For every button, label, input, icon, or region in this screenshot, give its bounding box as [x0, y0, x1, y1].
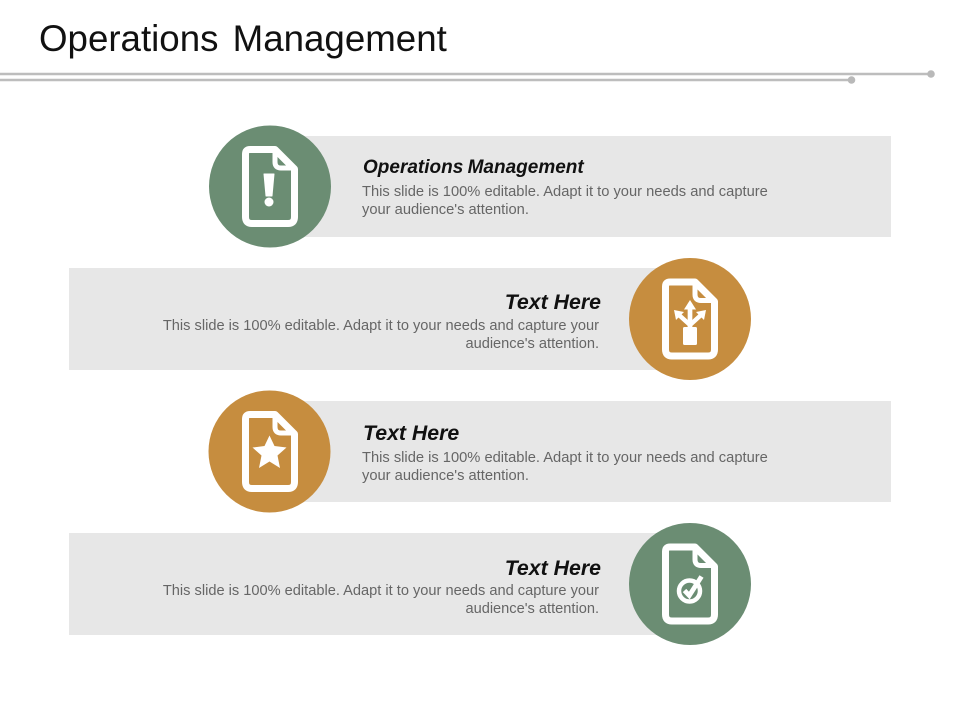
icon: document with exclamation mark — [209, 126, 331, 248]
text block: row 1: your audience's attention. — [362, 202, 529, 218]
text block: row 3 — [362, 450, 768, 484]
heading: row 1: Operations Management — [363, 157, 584, 178]
text block: row 2: audience's attention. — [465, 336, 599, 352]
text block: row 1 — [362, 184, 768, 218]
icon: document with branching arrows — [629, 258, 751, 380]
text block: row 4: audience's attention. — [465, 601, 599, 617]
panel: row 3 band — [300, 401, 891, 502]
text block: row 2 — [163, 318, 599, 352]
text block: row 3: your audience's attention. — [362, 468, 529, 484]
panel: row 1 band — [300, 136, 891, 237]
text block: row 4: This slide is 100% editable. Adapt it to your needs and capture your — [163, 583, 599, 599]
heading: row 3: Text Here — [363, 421, 459, 445]
panel: row 2 band — [69, 268, 660, 370]
header rule lines — [0, 70, 935, 84]
text block: row 1: This slide is 100% editable. Adapt it to your needs and capture — [362, 184, 768, 200]
heading: row 2: Text Here — [505, 290, 601, 314]
heading: row 4: Text Here — [505, 556, 601, 580]
text block: row 4 — [163, 583, 599, 617]
panel: row 4 band — [69, 533, 660, 635]
text block: row 3: This slide is 100% editable. Adapt it to your needs and capture — [362, 450, 768, 466]
title: Operations Management — [39, 18, 447, 59]
icon: document with check mark — [629, 523, 751, 645]
text block: row 2: This slide is 100% editable. Adapt it to your needs and capture your — [163, 318, 599, 334]
icon: document with star — [208, 390, 330, 512]
